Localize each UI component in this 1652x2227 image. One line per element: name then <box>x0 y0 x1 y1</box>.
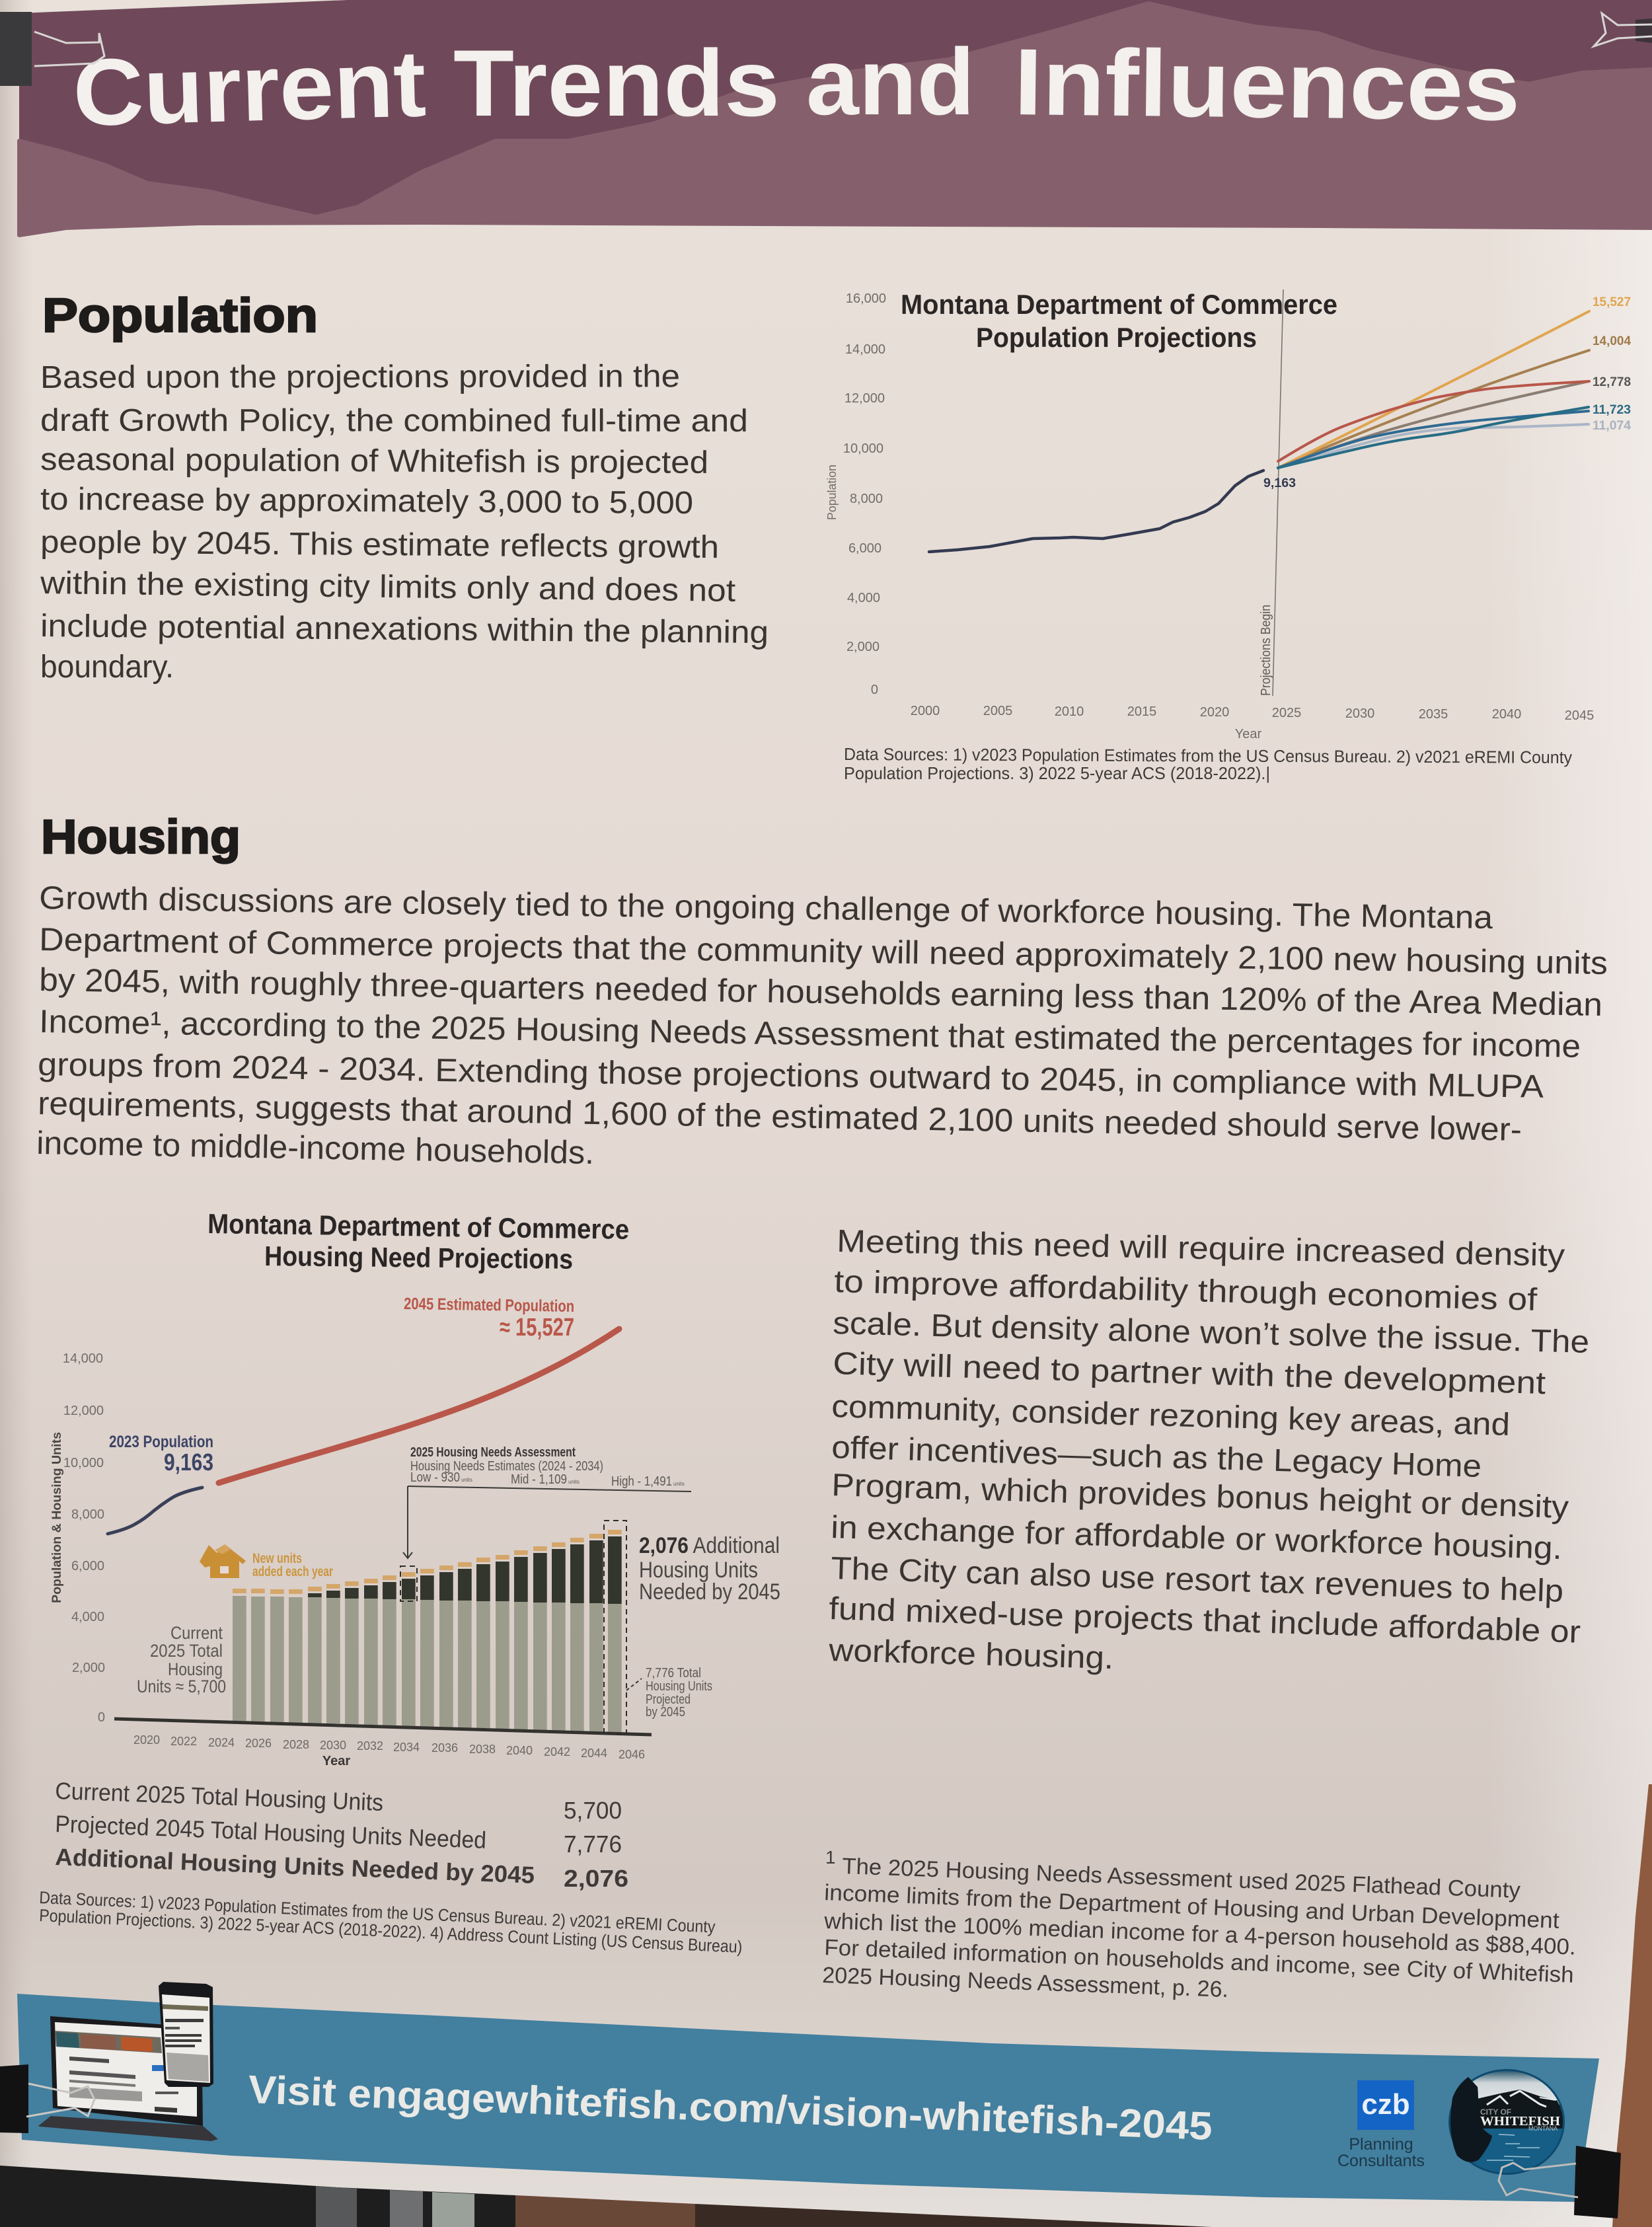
right column body text: in exchange for affordable or workforce housing. <box>831 1510 1563 1566</box>
housing body text: Growth discussions are closely tied to the ongoing challenge of workforce housing. The Montana <box>39 880 1493 936</box>
total units label <box>626 1666 712 1719</box>
historic population line <box>929 471 1263 552</box>
current units label <box>137 1623 226 1696</box>
additional units callout <box>639 1533 780 1604</box>
2023 population label: 9,163 <box>164 1449 213 1476</box>
footnote: 1 <box>825 1847 836 1868</box>
x axis labels: 2020 <box>133 1733 160 1747</box>
2045 population label <box>404 1295 574 1341</box>
end value labels: 12,778 <box>1593 375 1631 389</box>
background behind poster at bottom <box>0 1784 1652 2227</box>
housing needs assessment callout: units <box>673 1481 685 1487</box>
chart title: Montana Department of Commerce <box>207 1208 629 1245</box>
x axis labels: 2000 <box>911 704 940 718</box>
czb logo: czb <box>1361 2088 1410 2121</box>
end value labels <box>1263 295 1631 490</box>
housing chart data sources: Data Sources: 1) v2023 Population Estimates from the US Census Bureau. 2) v2021 eREMI County <box>39 1887 716 1937</box>
right column body text: offer incentives—such as the Legacy Home <box>831 1430 1482 1484</box>
chart title: Montana Department of Commerce <box>901 289 1337 320</box>
bars: additional housing units <box>308 1536 622 1604</box>
y axis labels: 12,000 <box>845 391 885 406</box>
chart data sources: Data Sources: 1) v2023 Population Estimates from the US Census Bureau. 2) v2021 eREMI County <box>844 744 1572 767</box>
x axis labels: 2035 <box>1419 707 1448 722</box>
y axis labels: 14,000 <box>63 1351 103 1366</box>
footer url: Visit engagewhitefish.com/vision-whitefish-2045 <box>248 2067 1213 2148</box>
x axis labels: 2024 <box>208 1736 235 1749</box>
population body text: seasonal population of Whitefish is projected <box>40 442 708 480</box>
dashed highlight boxes <box>400 1521 626 1734</box>
y axis labels: 4,000 <box>71 1610 104 1624</box>
y axis labels: 0 <box>98 1710 105 1725</box>
new units label <box>252 1551 333 1579</box>
end value labels: 14,004 <box>1593 334 1631 348</box>
title: Current <box>71 31 428 146</box>
bars: new units each year <box>233 1530 622 1594</box>
y axis labels: 10,000 <box>843 441 883 456</box>
right column body text: The City can also use resort tax revenues to help <box>831 1551 1564 1609</box>
panel: housing <box>36 811 1608 1171</box>
x axis labels: 2030 <box>1345 706 1374 721</box>
2045 population label: ≈ 15,527 <box>500 1314 574 1341</box>
chart data sources: Population Projections. 3) 2022 5-year ACS (2018-2022).| <box>844 763 1270 783</box>
x axis labels: 2025 <box>1272 706 1301 720</box>
city of whitefish logo: MONTANA <box>1528 2125 1558 2132</box>
x axis labels: 2034 <box>393 1741 420 1754</box>
right column body text: Meeting this need will require increased density <box>837 1224 1565 1273</box>
right column body text: fund mixed-use projects that include affordable or <box>829 1591 1581 1650</box>
title: Influences <box>1014 30 1521 141</box>
y axis labels: 8,000 <box>850 492 883 506</box>
end value labels: 15,527 <box>1593 295 1631 309</box>
right column body text: City will need to partner with the development <box>833 1346 1546 1401</box>
housing units table: 5,700 <box>564 1797 622 1824</box>
x axis labels: 2032 <box>357 1739 383 1753</box>
x axis labels: 2022 <box>170 1735 197 1748</box>
right column body text: Program, which provides bonus height or density <box>831 1468 1569 1525</box>
footer banner <box>17 1982 1599 2202</box>
x axis labels: 2026 <box>245 1737 272 1750</box>
housing body text: Department of Commerce projects that the community will need approximately 2,100 new housing units <box>39 922 1608 981</box>
population body text: people by 2045. This estimate reflects growth <box>40 525 719 565</box>
y axis labels: 16,000 <box>846 291 886 306</box>
housing body text: groups from 2024 - 2034. Extending those projections outward to 2045, in compliance with MLUPA <box>38 1047 1544 1105</box>
y axis labels: 12,000 <box>63 1404 104 1418</box>
x axis labels: 2028 <box>283 1738 309 1751</box>
housing units table <box>55 1777 628 1892</box>
title: Trends <box>453 31 780 136</box>
x axis labels: Year <box>1235 727 1262 741</box>
icon: phone <box>159 1982 213 2087</box>
x axis line <box>114 1719 652 1735</box>
chart data sources <box>844 744 1572 783</box>
footnote: which list the 100% median income for a 4-person household as $88,400. <box>823 1908 1576 1960</box>
y axis labels: 2,000 <box>846 640 880 654</box>
housing needs assessment callout: units <box>568 1479 580 1485</box>
housing units table: 2,076 <box>564 1865 628 1892</box>
x axis labels: 2042 <box>544 1745 570 1758</box>
y axis title: Population <box>825 465 839 520</box>
y axis labels: 8,000 <box>71 1507 104 1522</box>
right column body text: community, consider rezoning key areas, and <box>831 1389 1511 1443</box>
chart: housing need projections <box>50 1208 780 1768</box>
housing needs assessment callout: 2025 Housing Needs Assessment <box>410 1445 576 1460</box>
czb logo: Consultants <box>1337 2152 1425 2170</box>
2023 population label <box>109 1433 213 1476</box>
y axis labels: 6,000 <box>848 541 882 556</box>
x axis labels: 2044 <box>581 1747 607 1760</box>
additional units callout: Needed by 2045 <box>639 1579 780 1604</box>
2023 population label: 2023 Population <box>109 1433 213 1451</box>
mountains <box>19 3 1652 235</box>
x axis labels: 2038 <box>469 1743 496 1756</box>
projection lines <box>1278 311 1589 468</box>
new units label: added each year <box>252 1564 333 1579</box>
housing body text <box>36 880 1608 1171</box>
housing body text: Income¹, according to the 2025 Housing Needs Assessment that estimated the percentages for income <box>39 1004 1581 1065</box>
heading: housing: Housing <box>41 811 241 864</box>
x axis labels: 2030 <box>320 1739 346 1752</box>
y axis labels: 14,000 <box>845 342 885 357</box>
chart title: Housing Need Projections <box>264 1240 573 1275</box>
current units label: 2025 Total <box>150 1641 223 1661</box>
population body text: boundary. <box>40 650 174 685</box>
total units label: Projected <box>646 1692 691 1707</box>
y axis labels <box>843 291 886 697</box>
x axis labels: 2015 <box>1127 704 1156 719</box>
housing needs assessment callout: units <box>461 1477 472 1483</box>
population body text: draft Growth Policy, the combined full-time and <box>40 403 748 439</box>
city of whitefish logo <box>1448 2069 1565 2175</box>
population body text: to increase by approximately 3,000 to 5,000 <box>40 482 693 521</box>
end value labels: 9,163 <box>1263 476 1296 490</box>
y axis labels: 2,000 <box>72 1661 105 1675</box>
housing needs assessment callout: Mid - 1,109 <box>511 1472 567 1487</box>
housing needs assessment callout <box>403 1445 691 1558</box>
city of whitefish logo: WHITEFISH <box>1480 2114 1560 2129</box>
city of whitefish logo: CITY OF <box>1480 2107 1511 2117</box>
historic population line <box>108 1488 202 1534</box>
chart title <box>207 1208 629 1275</box>
footnote: The 2025 Housing Needs Assessment used 2025 Flathead County <box>842 1854 1521 1903</box>
bars: existing housing units <box>233 1596 622 1732</box>
right column body text: scale. But density alone won’t solve the issue. The <box>833 1306 1590 1360</box>
end value labels: 11,074 <box>1593 419 1631 433</box>
title: and <box>806 30 975 135</box>
total units label: 7,776 Total <box>646 1666 701 1680</box>
x axis labels: 2036 <box>432 1741 458 1755</box>
y axis labels: 10,000 <box>63 1456 104 1470</box>
additional units callout: Housing Units <box>639 1558 758 1583</box>
binder clip: top left <box>0 12 104 86</box>
header banner <box>19 0 1652 235</box>
housing units table: Current 2025 Total Housing Units <box>55 1777 384 1816</box>
x axis labels: Year <box>322 1754 350 1768</box>
housing units table: 7,776 <box>564 1831 622 1858</box>
housing chart data sources: Population Projections. 3) 2022 5-year ACS (2018-2022). 4) Address Count Listing (US Census Bureau) <box>39 1905 743 1957</box>
line chart: population projections <box>825 289 1631 783</box>
new units label: New units <box>252 1551 302 1566</box>
x axis labels <box>911 704 1594 741</box>
x axis labels: 2020 <box>1200 705 1229 720</box>
y axis labels: 6,000 <box>71 1559 104 1573</box>
projected population line <box>219 1329 619 1483</box>
right column body text: to improve affordability through economies of <box>834 1264 1538 1318</box>
current units label: Housing <box>168 1659 223 1679</box>
panel: population <box>40 289 769 685</box>
chart title <box>901 289 1337 353</box>
footnote: For detailed information on households and income, see City of Whitefish <box>824 1935 1574 1988</box>
binder clip: top right <box>1594 13 1652 46</box>
population body text <box>40 359 769 685</box>
x axis labels: 2040 <box>506 1744 533 1757</box>
projections begin marker: Projections Begin <box>1259 605 1273 696</box>
x axis labels: 2010 <box>1055 704 1084 719</box>
y axis labels <box>63 1351 105 1725</box>
housing needs assessment callout: Housing Needs Estimates (2024 - 2034) <box>410 1459 603 1474</box>
end value labels: 11,723 <box>1593 403 1631 417</box>
housing needs assessment callout: High - 1,491 <box>611 1474 672 1489</box>
current units label: Current <box>170 1623 223 1643</box>
house icon <box>200 1544 246 1578</box>
housing units table: Additional Housing Units Needed by 2045 <box>55 1843 535 1889</box>
y axis title: Population & Housing Units <box>50 1432 64 1603</box>
czb logo <box>1337 2080 1425 2170</box>
total units label: by 2045 <box>646 1705 685 1719</box>
y axis labels: 0 <box>871 683 878 697</box>
population body text: include potential annexations within the planning <box>40 609 769 650</box>
binder clip: bottom left <box>0 2064 94 2133</box>
population body text: Based upon the projections provided in the <box>40 359 680 395</box>
y axis labels: 4,000 <box>847 591 880 605</box>
czb logo: Planning <box>1349 2135 1413 2154</box>
footnote <box>822 1847 1576 2002</box>
chart title: Population Projections <box>976 322 1257 353</box>
total units label: Housing Units <box>646 1679 712 1694</box>
housing needs assessment callout: Low - 930 <box>410 1470 460 1485</box>
x axis labels: 2040 <box>1492 707 1521 722</box>
projections begin marker <box>1259 289 1283 696</box>
additional units callout: 2,076 Additional <box>639 1533 780 1558</box>
current units label: Units ≈ 5,700 <box>137 1677 226 1696</box>
footnote: income limits from the Department of Housing and Urban Development <box>824 1880 1560 1934</box>
x axis labels: 2046 <box>619 1748 645 1761</box>
housing units table: Projected 2045 Total Housing Units Needed <box>55 1810 487 1854</box>
housing body text: by 2045, with roughly three-quarters needed for households earning less than 120% of the Area Median <box>39 962 1602 1023</box>
right column body text <box>828 1224 1590 1676</box>
heading: population: Population <box>42 289 318 342</box>
population body text: within the existing city limits only and does not <box>40 566 735 609</box>
title <box>71 30 1521 146</box>
x axis labels: 2005 <box>983 704 1012 718</box>
housing body text: requirements, suggests that around 1,600 of the estimated 2,100 units needed should serve lower- <box>38 1086 1522 1148</box>
2045 population label: 2045 Estimated Population <box>404 1295 574 1316</box>
right column body text: workforce housing. <box>828 1633 1114 1676</box>
icon: laptop <box>38 2016 218 2141</box>
x axis labels <box>133 1733 645 1768</box>
housing body text: income to middle-income households. <box>36 1125 595 1171</box>
footnote: 2025 Housing Needs Assessment, p. 26. <box>822 1963 1229 2002</box>
binder clip: bottom right <box>1499 2146 1621 2218</box>
x axis labels: 2045 <box>1565 708 1594 723</box>
